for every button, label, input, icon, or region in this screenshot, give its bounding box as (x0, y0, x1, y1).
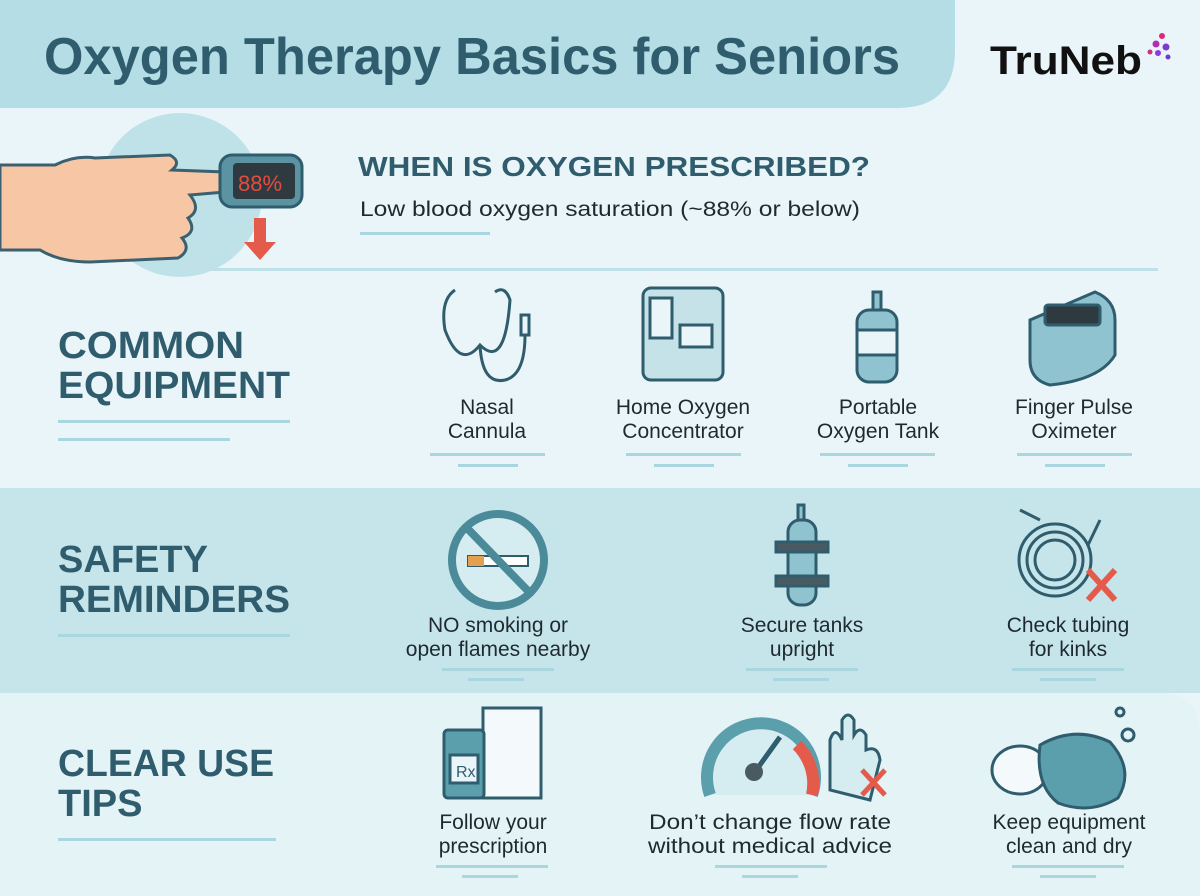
text: tubing: Check tubing (1007, 614, 1129, 637)
text: secure tank: Secure tanks (741, 614, 863, 637)
clear use band (0, 693, 1200, 896)
heading: safety reminders (58, 539, 290, 637)
text: secure tank (741, 614, 863, 681)
text: pulse oximeter (1015, 396, 1133, 467)
icon: hand with oximeter: 88% (238, 171, 282, 196)
text: prescription: Follow your (439, 811, 547, 834)
icon: tubing (1019, 510, 1115, 600)
title: Oxygen Therapy Basics for Seniors (44, 28, 900, 86)
heading: common equipment (58, 325, 290, 441)
text: sponge: Keep equipment (993, 811, 1146, 834)
text: portable tank (817, 396, 940, 467)
logo: TruNeb (990, 33, 1170, 83)
text: portable tank: Portable (839, 396, 917, 419)
heading: when is oxygen prescribed: WHEN IS OXYGEN PRESCRIBED? (358, 151, 870, 182)
text: tubing: for kinks (1029, 638, 1107, 661)
icon: nasal cannula (444, 290, 529, 381)
heading: when is oxygen prescribed (358, 151, 870, 235)
text: concentrator: Concentrator (622, 420, 744, 443)
icon: no smoking (452, 514, 544, 606)
text: prescription (436, 811, 548, 878)
heading: common equipment: EQUIPMENT (58, 365, 290, 407)
text: pulse oximeter: Oximeter (1031, 420, 1117, 443)
text: no smoking: NO smoking or (428, 614, 568, 637)
icon: secure tank (776, 505, 828, 605)
icon: portable tank (857, 292, 897, 382)
text: portable tank: Oxygen Tank (817, 420, 940, 443)
safety band (0, 488, 1200, 693)
text: concentrator (616, 396, 750, 467)
text: secure tank: upright (770, 638, 834, 661)
icon: prescription: Rx (456, 764, 476, 781)
heading: clear use tips: TIPS (58, 783, 142, 825)
heading: common equipment: COMMON (58, 325, 244, 367)
text: nasal cannula: Cannula (448, 420, 526, 443)
header band (0, 0, 955, 108)
icon: hand with oximeter (0, 113, 302, 277)
text: nasal cannula: Nasal (460, 396, 514, 419)
text: no smoking: open flames nearby (406, 638, 591, 661)
heading: clear use tips: CLEAR USE (58, 743, 274, 785)
icon: concentrator (643, 288, 723, 380)
icon: pulse oximeter (1030, 292, 1115, 385)
text: nasal cannula (430, 396, 545, 467)
text: tubing (1007, 614, 1129, 681)
text: flow rate: Don’t change flow rate (649, 811, 891, 834)
text: concentrator: Home Oxygen (616, 396, 750, 419)
text: flow rate: without medical advice (647, 835, 892, 858)
logo: TruNeb: TruNeb (990, 39, 1142, 83)
heading: safety reminders: REMINDERS (58, 579, 290, 621)
text: pulse oximeter: Finger Pulse (1015, 396, 1133, 419)
text: sponge (993, 811, 1146, 878)
icon: prescription (444, 708, 541, 798)
heading: safety reminders: SAFETY (58, 539, 208, 581)
text: no smoking (406, 614, 591, 681)
text: sponge: clean and dry (1006, 835, 1133, 858)
heading: when is oxygen prescribed: Low blood oxygen saturation (~88% or below) (360, 198, 860, 221)
text: flow rate (647, 811, 892, 878)
icon: gauge and hand (707, 715, 885, 800)
heading: clear use tips (58, 743, 276, 841)
text: prescription: prescription (439, 835, 547, 858)
icon: sponge (992, 708, 1134, 808)
